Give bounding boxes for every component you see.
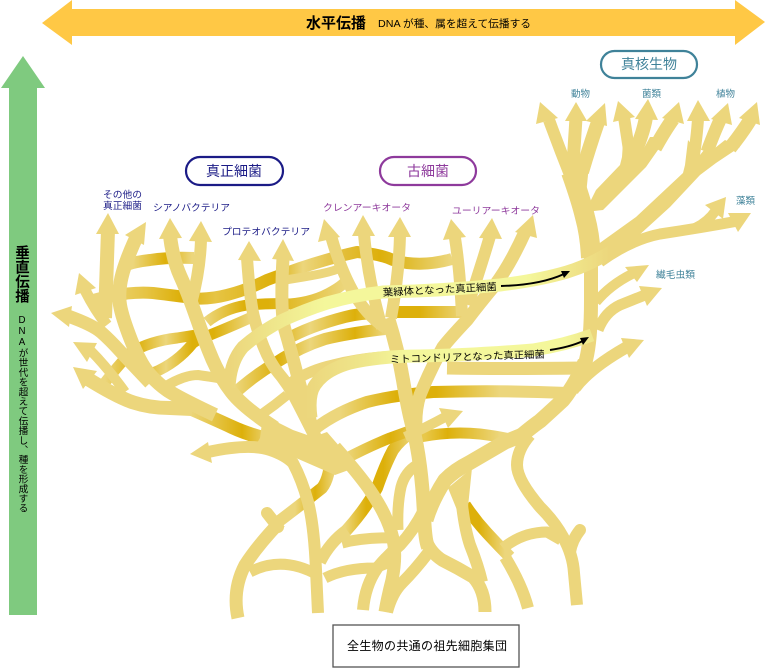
labels: bacteria groups: 真正細菌 [103, 200, 142, 212]
arrow: animals [536, 102, 607, 205]
arrow: proteobacteria 1 [238, 241, 315, 437]
branches: bacteria [51, 213, 315, 437]
arrow: left branch 1 [75, 273, 107, 325]
labels: eukaryote groups: 動物 [571, 88, 590, 100]
label: eukaryotes pill [601, 51, 697, 78]
callout: chloroplast: 葉緑体となった真正細菌 [382, 280, 497, 299]
callout: mitochondria: ミトコンドリアとなった真正細菌 [390, 348, 545, 366]
horizontal transfer links [93, 252, 582, 557]
labels: eukaryote groups: 藻類 [736, 195, 755, 207]
arrow: crenarchaeota 1 [318, 219, 386, 328]
arrow: vertical gene transfer [1, 56, 45, 615]
labels: bacteria groups: その他の [103, 189, 142, 201]
label: bacteria pill [186, 157, 283, 185]
labels: bacteria groups [103, 189, 310, 238]
arrow: horizontal gene transfer [42, 0, 765, 45]
branches: eukaryotes [426, 99, 760, 520]
label box: common ancestor: 全生物の共通の祖先細胞集団 [347, 638, 507, 653]
labels: bacteria groups: シアノバクテリア [153, 203, 230, 214]
label: bacteria pill: 真正細菌 [206, 163, 262, 179]
arrow: left branch 4 [73, 367, 192, 409]
text: horizontal transfer description: DNA が種、属を超えて伝播する [378, 17, 531, 30]
arrow: ciliates [596, 265, 662, 330]
heading: horizontal transfer: 水平伝播 [306, 15, 366, 32]
callout: chloroplast [382, 271, 570, 299]
label: archaea pill: 古細菌 [407, 163, 449, 179]
label box: common ancestor [333, 625, 519, 667]
central hub mass [253, 415, 357, 475]
label: archaea pill [380, 157, 476, 185]
branches: archaea [318, 215, 537, 547]
arrow: lower right branch [575, 338, 644, 388]
labels: bacteria groups: プロテオバクテリア [222, 227, 310, 238]
tree of life [51, 99, 760, 618]
arrow: left from hub [190, 442, 318, 613]
arrow: proteobacteria 2 [272, 239, 315, 437]
trunk [571, 172, 591, 258]
labels: archaea groups: ユーリアーキオータ [452, 206, 540, 217]
hub and roots [190, 415, 580, 618]
labels: archaea groups: クレンアーキオータ [323, 203, 411, 214]
arrow: crenarchaeota 2 [352, 215, 382, 328]
arrow: cyanobacteria 1 [159, 218, 275, 428]
arrow: mitochondria [550, 337, 589, 350]
yellow band: mitochondria [310, 335, 592, 418]
archaea stem [388, 318, 428, 547]
arrow: euryarchaeota 1 [443, 219, 466, 316]
arrow: other bacteria 2 [119, 222, 215, 415]
arrow: chloroplast [501, 271, 570, 286]
arrow: algae [600, 197, 751, 262]
arrow: branch to right of hub [405, 408, 463, 437]
labels: eukaryote groups: 植物 [716, 88, 735, 100]
heading: vertical transfer: 垂直伝播 [13, 245, 29, 303]
arrow: left branch 3 [73, 342, 125, 392]
label: eukaryotes pill: 真核生物 [621, 56, 677, 72]
arrow: euryarchaeota 3 [416, 215, 537, 430]
arrow: fungi [585, 99, 684, 212]
arrow: other bacteria [96, 213, 119, 318]
arrow: left branch 2 [51, 306, 150, 383]
labels: eukaryote groups: 菌類 [642, 88, 661, 100]
arrow: cyanobacteria 2 [189, 221, 212, 300]
text: vertical transfer description: DNAが世代を超えて伝播し、種を形成する [16, 315, 28, 513]
yellow band: chloroplast [229, 251, 612, 388]
labels: archaea groups [323, 203, 540, 217]
labels: eukaryote groups: 繊毛虫類 [656, 269, 695, 281]
arrow: plants [590, 100, 760, 265]
arrow: crenarchaeota 3 [388, 217, 411, 318]
callout: mitochondria [390, 337, 589, 366]
arc to roots [426, 434, 525, 520]
arrow: euryarchaeota 2 [468, 218, 502, 305]
labels: eukaryote groups [571, 88, 755, 281]
